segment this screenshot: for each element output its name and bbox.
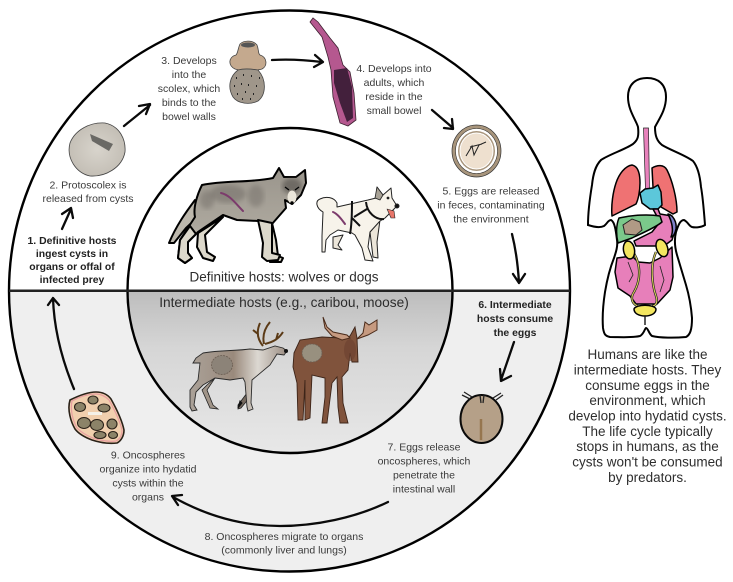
outer ring of the cycle	[9, 10, 570, 572]
icon: hydatid cyst	[69, 392, 124, 443]
step 9 text: organs	[132, 492, 164, 504]
text block: humans note: consume eggs in the	[585, 378, 710, 393]
text block: humans note: intermediate hosts. They	[574, 362, 722, 378]
icon: adult tapeworm	[310, 18, 356, 126]
icon: egg	[452, 125, 501, 177]
arrow: step 8	[172, 495, 388, 526]
divider between definitive and intermediate halves	[9, 290, 570, 292]
lower half background of the cycle ring	[9, 291, 570, 572]
organ: cyst in liver	[623, 219, 642, 235]
icon: tapeworm in dog	[333, 212, 345, 224]
step 6 text: the eggs	[494, 328, 537, 339]
organ: liver	[617, 215, 662, 243]
arrow: step 5 to 6	[512, 234, 525, 283]
step 5 text: in feces, contaminating	[437, 200, 545, 212]
step 9 text: organize into hydatid	[100, 464, 197, 476]
organ: right kidney	[654, 238, 670, 258]
step 8 text: (commonly liver and lungs)	[221, 544, 347, 556]
step 4 text: small bowel	[367, 105, 421, 117]
text block: humans note: by predators.	[608, 470, 687, 485]
arrow: step 1 to 2	[62, 208, 73, 229]
step 4 text: adults, which	[364, 77, 425, 89]
icon: moose	[293, 317, 377, 423]
step 2 text: 2. Protoscolex is	[49, 180, 127, 192]
heading: definitive hosts: Definitive hosts: wolves or dogs	[189, 270, 379, 284]
text block: humans note: Humans are like the	[587, 347, 708, 362]
icon: hatching egg	[460, 392, 503, 443]
step 3 text: into the	[172, 69, 206, 81]
organ: intestines	[615, 247, 673, 304]
step 7 text: penetrate the	[393, 470, 455, 482]
organ: stomach	[634, 209, 676, 246]
icon: cyst on caribou	[212, 356, 232, 374]
arrow: step 6 to 7	[500, 342, 514, 381]
text block: humans note: develop into hydatid cysts.	[568, 408, 727, 424]
step 8 text: 8. Oncospheres migrate to organs	[205, 531, 363, 543]
step 2 text: released from cysts	[42, 193, 134, 205]
step 6 text: hosts consume	[477, 314, 553, 325]
icon: caribou	[190, 322, 288, 411]
step 1 text: 1. Definitive hosts	[28, 236, 117, 247]
icon: scolex	[230, 41, 266, 103]
text block: humans note: environment, which	[589, 393, 706, 408]
step 3 text: bowel walls	[162, 111, 216, 123]
text block: humans note: stops in humans, as the	[576, 439, 719, 454]
step 9 text: 9. Oncospheres	[111, 450, 185, 462]
arrow: step 4 to 5	[432, 110, 453, 129]
step 3 text: binds to the	[162, 97, 216, 109]
organ: ureters	[632, 252, 657, 306]
organ: bladder	[634, 305, 656, 316]
step 5 text: 5. Eggs are released	[443, 186, 540, 198]
icon: cyst on moose	[302, 344, 322, 362]
panel: intermediate hosts background	[127, 291, 453, 455]
organ: spleen	[668, 214, 676, 237]
step 5 text: the environment	[453, 214, 529, 226]
step 4 text: reside in the	[365, 91, 423, 103]
step 7 text: oncospheres, which	[378, 456, 471, 468]
step 4 text: 4. Develops into	[356, 63, 432, 75]
inner circle	[128, 128, 452, 453]
icon: wolf	[169, 168, 306, 263]
arrow: step 3 to 4	[272, 55, 323, 67]
organ: esophagus	[644, 128, 650, 190]
step 7 text: 7. Eggs release	[388, 442, 461, 454]
step 3 text: 3. Develops	[161, 55, 217, 67]
text block: humans note: cysts won't be consumed	[572, 454, 723, 470]
step 1 text: organs or offal of	[29, 262, 115, 273]
step 1 text: infected prey	[40, 275, 105, 286]
organ: heart	[640, 185, 662, 209]
organ: left lung	[612, 165, 640, 216]
step 3 text: scolex, which	[158, 83, 220, 95]
step 6 text: 6. Intermediate	[478, 300, 552, 311]
icon: protoscolex cyst	[69, 123, 125, 176]
text block: humans note: The life cycle typically	[582, 424, 713, 439]
human figure with organs	[588, 78, 705, 338]
arrow: step 9 to 1	[48, 298, 74, 389]
icon: dog	[317, 187, 399, 261]
organ: right lung	[652, 166, 677, 214]
step 7 text: intestinal wall	[393, 484, 455, 496]
icon: tapeworm in wolf	[221, 193, 243, 211]
step 1 text: ingest cysts in	[36, 249, 108, 260]
organ: left kidney	[622, 240, 636, 260]
step 9 text: cysts within the	[112, 478, 184, 490]
arrow: step 2 to 3	[124, 104, 150, 126]
heading: intermediate hosts: Intermediate hosts (e.g., caribou, moose)	[159, 295, 409, 310]
